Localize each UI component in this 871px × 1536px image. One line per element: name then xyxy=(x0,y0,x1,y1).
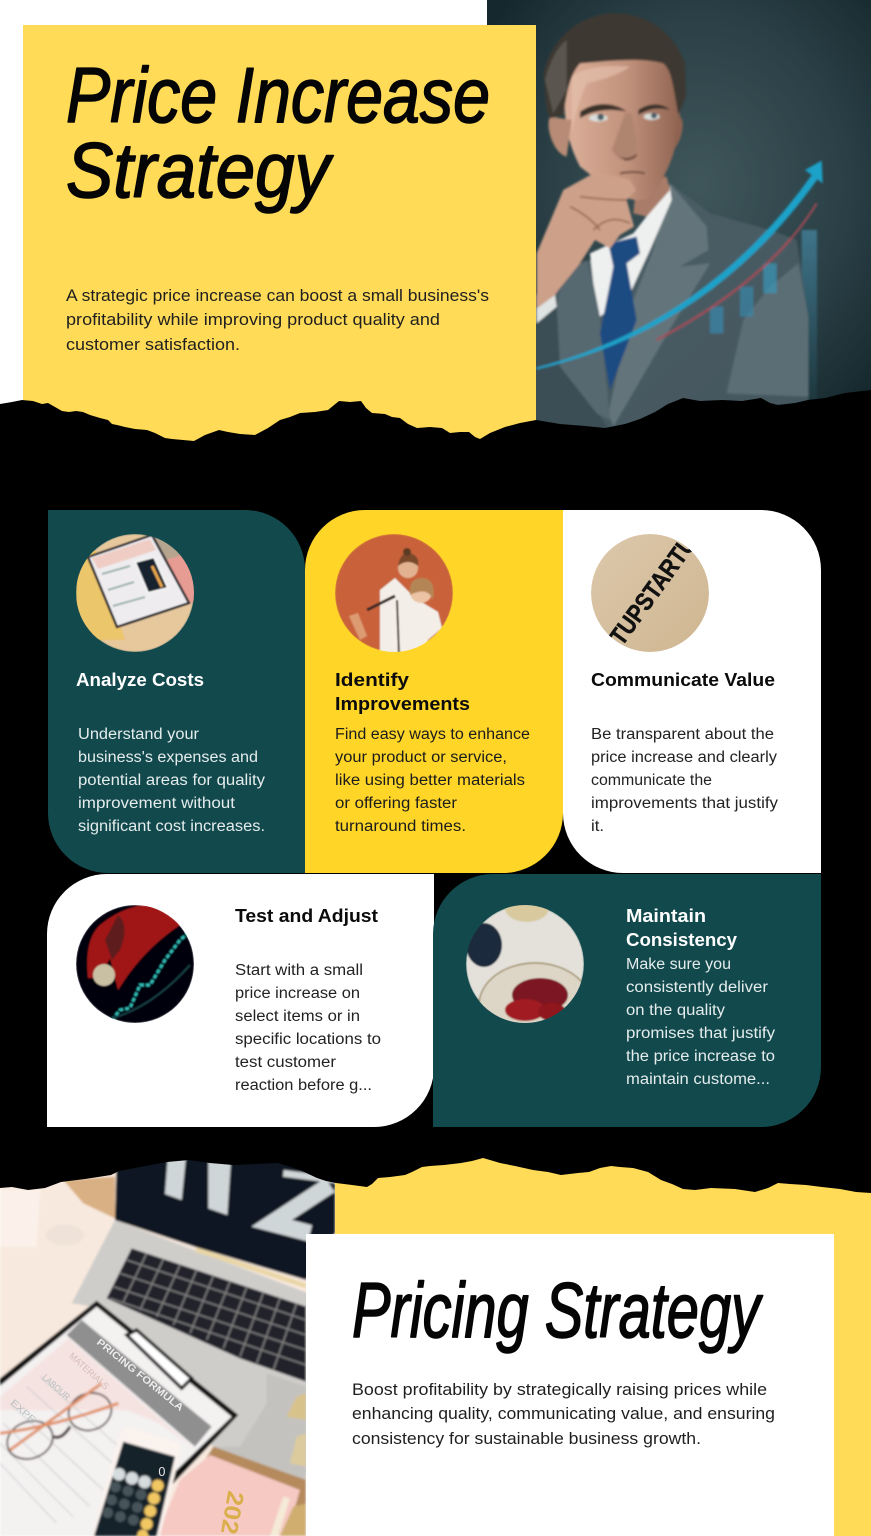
body text: improvements that justify xyxy=(591,795,778,812)
icon: tablet with calculator photo xyxy=(76,530,200,652)
heading: Consistency xyxy=(626,929,738,950)
body text: or offering faster xyxy=(335,795,457,812)
intro text xyxy=(66,287,489,354)
body text: specific locations to xyxy=(235,1031,381,1048)
intro text: A strategic price increase can boost a small business's xyxy=(66,287,489,305)
body text xyxy=(591,726,778,835)
black torn band xyxy=(0,390,871,1193)
body text xyxy=(335,726,530,835)
footer photo: pricing formula desk: MATERIALS xyxy=(67,1351,111,1392)
heading: Maintain xyxy=(626,905,706,926)
body text: communicate the xyxy=(591,772,712,789)
body text: potential areas for quality xyxy=(78,772,265,789)
heading: Analyze Costs xyxy=(76,669,204,690)
icon: kraft paper stamp photo: TUPSTARTU xyxy=(604,531,702,651)
body text: like using better materials xyxy=(335,772,525,789)
body text: reaction before g... xyxy=(235,1077,372,1094)
intro text: profitability while improving product quality and xyxy=(66,311,440,329)
body text xyxy=(626,956,775,1088)
footer text: consistency for sustainable business growth. xyxy=(352,1430,701,1448)
body text: promises that justify xyxy=(626,1025,775,1042)
card: Analyze Costs xyxy=(48,510,305,873)
card: Communicate Value xyxy=(563,510,821,873)
footer photo: pricing formula desk: PRICING FORMULA xyxy=(94,1337,185,1414)
header yellow panel xyxy=(23,25,536,445)
body text: the price increase to xyxy=(626,1048,775,1065)
footer text: enhancing quality, communicating value, and ensuring xyxy=(352,1405,775,1423)
footer text xyxy=(352,1381,775,1448)
heading xyxy=(626,905,738,950)
card: Maintain Consistency xyxy=(433,874,821,1127)
body text xyxy=(235,962,381,1094)
heading: Identify xyxy=(335,669,410,690)
footer photo: pricing formula desk: EXPE xyxy=(9,1397,38,1425)
intro text: customer satisfaction. xyxy=(66,336,240,354)
footer text: Boost profitability by strategically raising prices while xyxy=(352,1381,767,1399)
heading: Test and Adjust xyxy=(235,905,378,926)
footer photo: pricing formula desk: 202 xyxy=(216,1489,249,1536)
footer white panel xyxy=(306,1234,834,1536)
body text: improvement without xyxy=(78,795,236,812)
heading: Improvements xyxy=(335,693,470,714)
body text: maintain custome... xyxy=(626,1071,770,1088)
body text: Start with a small xyxy=(235,962,363,979)
body text: Make sure you xyxy=(626,956,731,973)
card: Identify Improvements xyxy=(305,510,563,873)
footer photo: pricing formula desk xyxy=(0,1150,335,1536)
body text: test customer xyxy=(235,1054,336,1071)
body text: Understand your xyxy=(78,726,199,743)
card: Test and Adjust xyxy=(47,874,434,1127)
body text: significant cost increases. xyxy=(78,818,265,835)
body text: Find easy ways to enhance xyxy=(335,726,530,743)
body text: price increase and clearly xyxy=(591,749,777,766)
heading: Communicate Value xyxy=(591,669,775,690)
body text: select items or in xyxy=(235,1008,360,1025)
body text: it. xyxy=(591,818,604,835)
icon: berries on linen photo xyxy=(466,905,584,1023)
body text: consistently deliver xyxy=(626,979,768,996)
body text: your product or service, xyxy=(335,749,507,766)
footer yellow background xyxy=(335,1150,871,1536)
body text xyxy=(78,726,265,835)
body text: turnaround times. xyxy=(335,818,466,835)
footer photo: pricing formula desk: 0 xyxy=(158,1465,165,1479)
footer photo: pricing formula desk: LABOUR xyxy=(40,1372,72,1402)
main title: Price Increase xyxy=(66,51,490,139)
body text: Be transparent about the xyxy=(591,726,774,743)
main title: Strategy xyxy=(66,126,334,214)
body text: business's expenses and xyxy=(78,749,258,766)
header photo: businessman with rising chart xyxy=(487,0,871,440)
heading xyxy=(335,669,470,714)
main title xyxy=(66,51,490,214)
icon: mother and child painting photo xyxy=(335,534,453,655)
body text: on the quality xyxy=(626,1002,725,1019)
body text: price increase on xyxy=(235,985,360,1002)
icon: coin and stock chart photo xyxy=(76,905,194,1023)
